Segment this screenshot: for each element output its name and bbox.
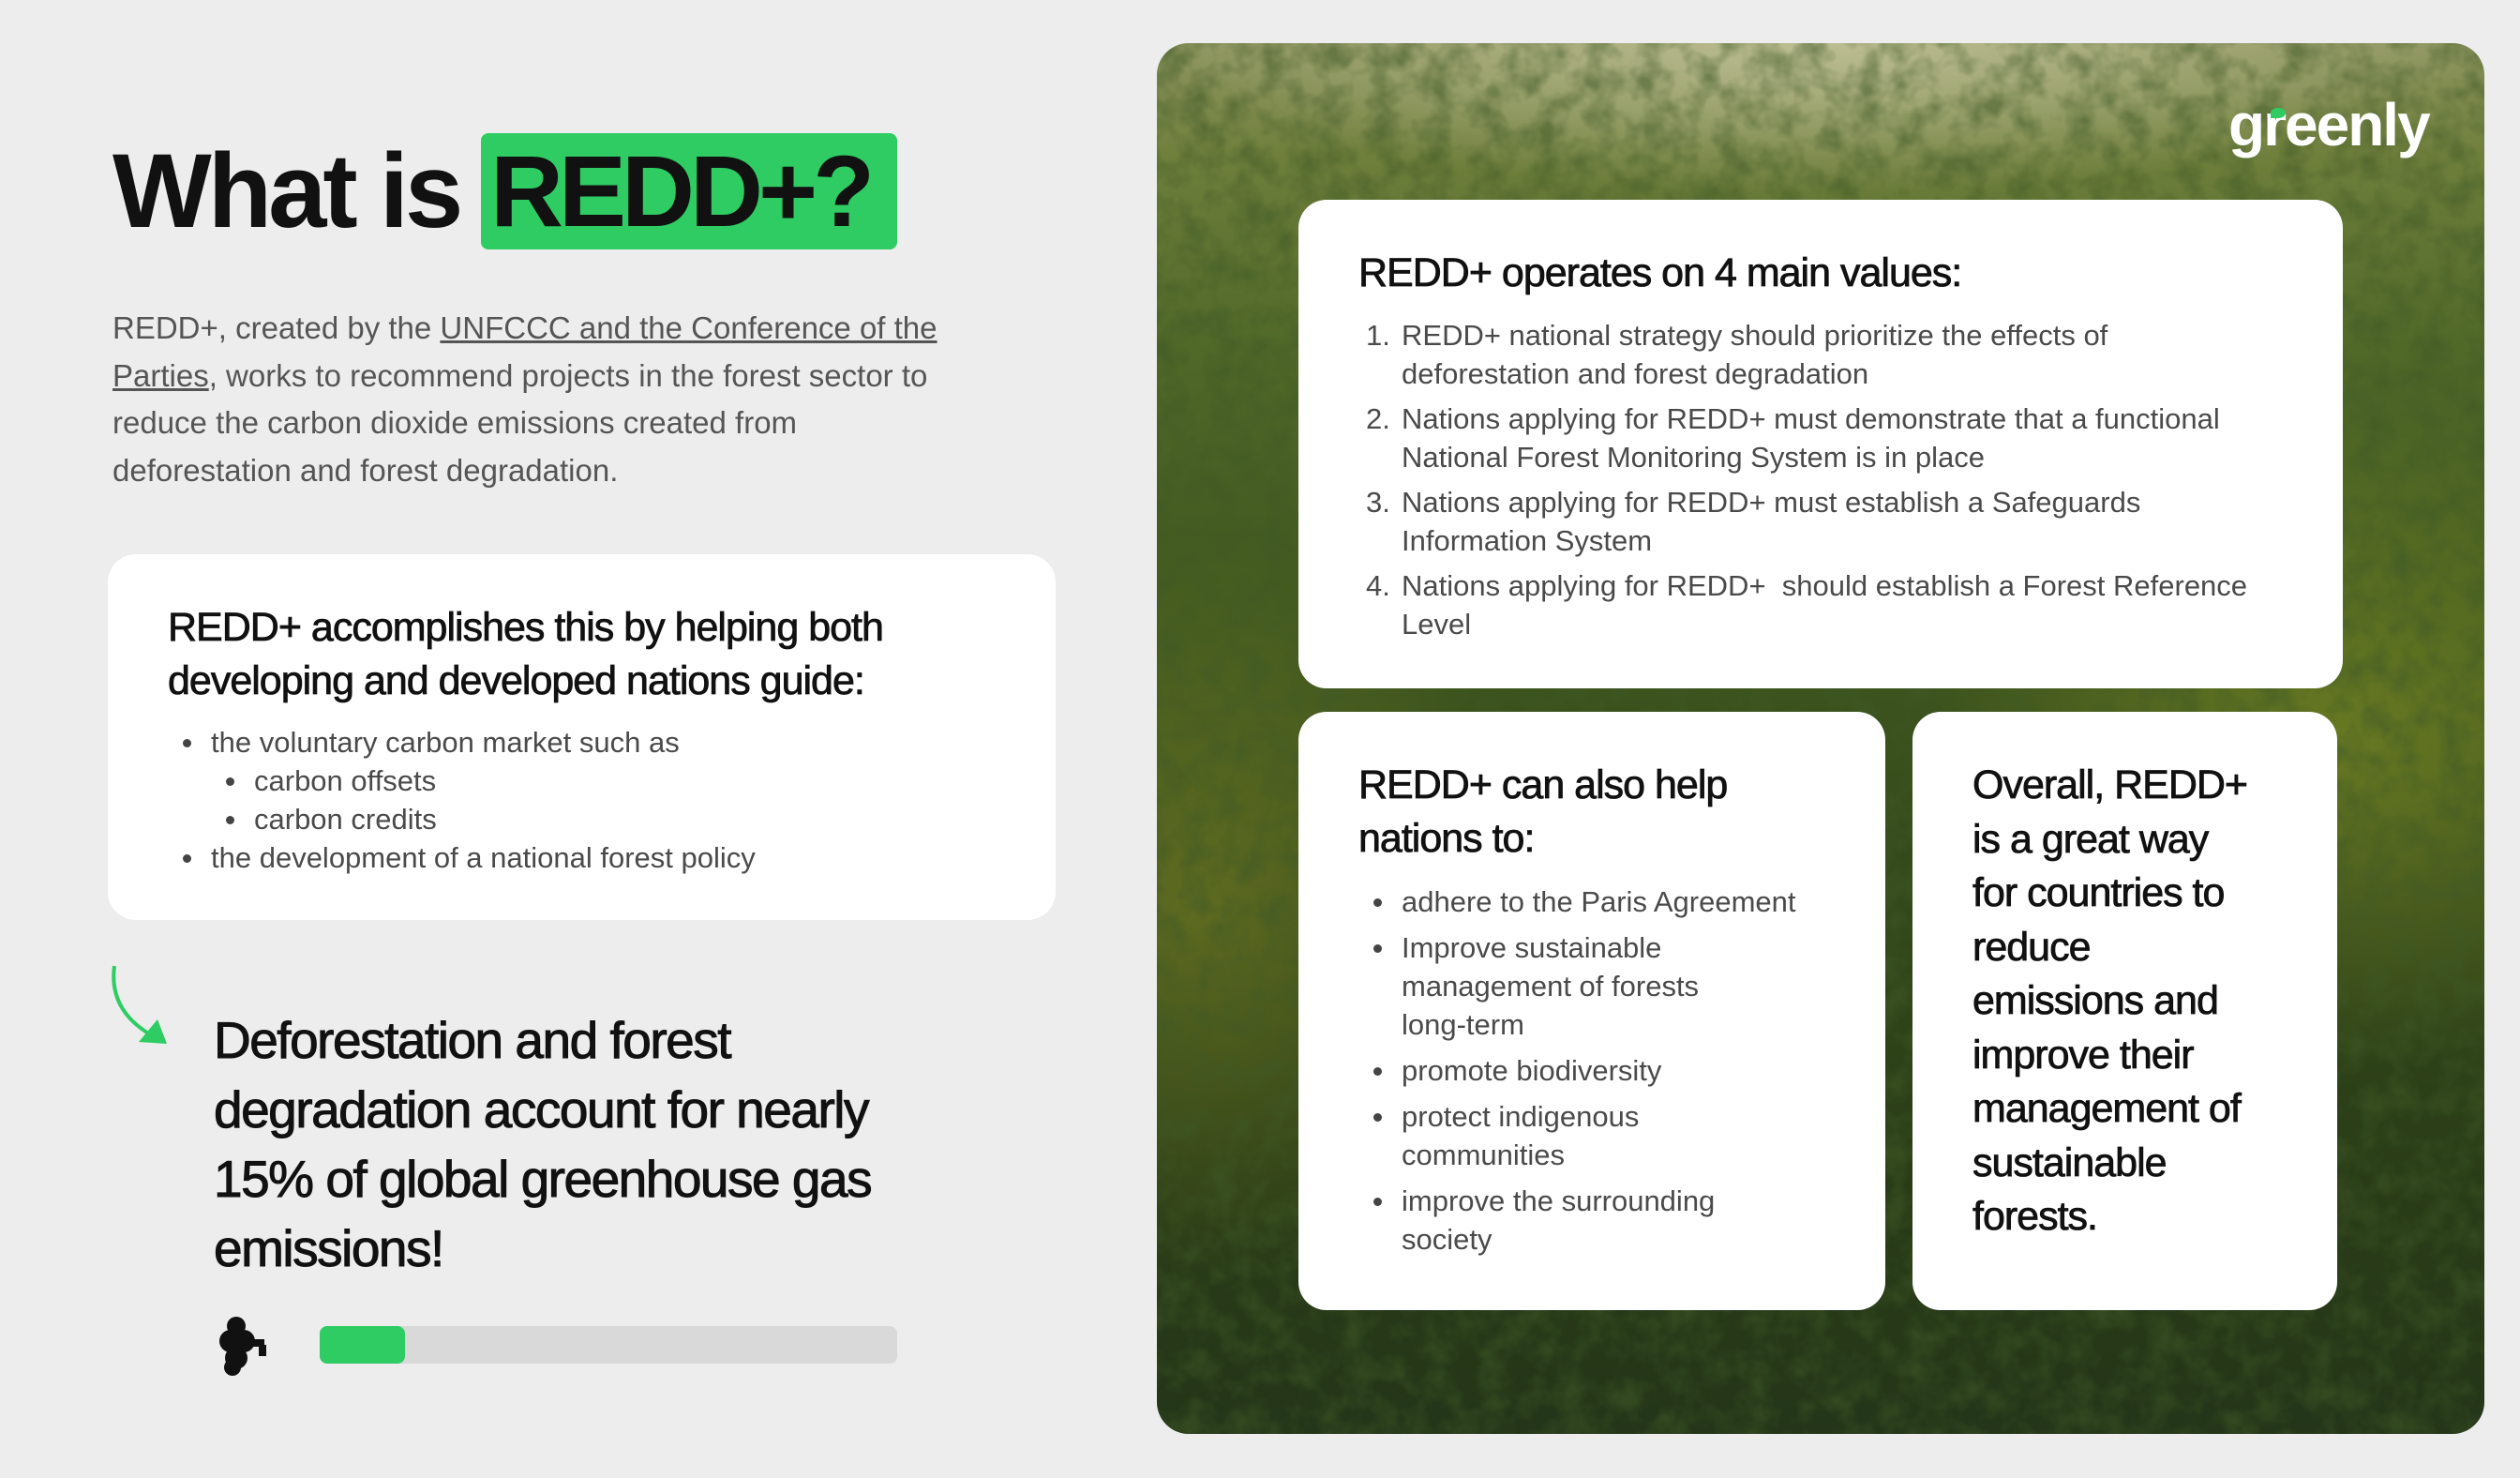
intro paragraph: deforestation and forest degradation.: [112, 452, 618, 488]
stat text: 15% of global greenhouse gas: [214, 1150, 871, 1208]
icon: smoke: [219, 1317, 266, 1376]
bullet list: promote biodiversity: [1402, 1054, 1661, 1087]
numbered list: [1366, 319, 2247, 641]
conclusion text: [1972, 762, 2247, 1239]
bullet list: [183, 726, 756, 874]
numbered list: Level: [1402, 608, 1471, 641]
bullet list: [1373, 885, 1796, 1256]
panel heading: REDD+ operates on 4 main values:: [1358, 250, 1961, 295]
panel heading: nations to:: [1358, 816, 1534, 861]
panel heading: developing and developed nations guide:: [168, 658, 864, 703]
numbered list: National Forest Monitoring System is in place: [1402, 441, 1985, 474]
intro paragraph: Parties, works to recommend projects in the forest sector to: [112, 358, 927, 392]
title highlight: REDD+?: [490, 134, 870, 248]
numbered list: REDD+ national strategy should prioritize the effects of: [1402, 319, 2108, 352]
stat text: Deforestation and forest: [214, 1011, 730, 1069]
bullet list: management of forests: [1402, 970, 1699, 1003]
conclusion text: management of: [1972, 1086, 2241, 1131]
conclusion text: Overall, REDD+: [1972, 762, 2247, 807]
photo panel: [1157, 43, 2484, 1434]
panel heading: REDD+ accomplishes this by helping both: [168, 605, 883, 650]
conclusion text: improve their: [1972, 1032, 2194, 1077]
panel heading: [1358, 762, 1727, 861]
bullet list: the development of a national forest policy: [211, 841, 756, 874]
progress bar: [320, 1326, 897, 1364]
panel heading: [168, 605, 883, 703]
bullet list: improve the surrounding: [1402, 1184, 1715, 1217]
panel: 4 main values: [1298, 200, 2343, 688]
panel: 4 main values: 4.: [1366, 569, 1390, 602]
stat text: degradation account for nearly: [214, 1080, 868, 1139]
bullet list: the voluntary carbon market such as: [211, 726, 680, 759]
forest texture: [1157, 43, 2484, 1434]
conclusion text: emissions and: [1972, 978, 2218, 1023]
intro paragraph: [112, 310, 938, 488]
panel: overall: [1912, 712, 2337, 1310]
conclusion text: sustainable: [1972, 1140, 2167, 1185]
conclusion text: is a great way: [1972, 816, 2208, 861]
numbered list: Nations applying for REDD+ must establish a Safeguards: [1402, 486, 2140, 519]
title: [112, 132, 897, 249]
logo: greenly: [2228, 91, 2429, 158]
bullet list: carbon credits: [254, 803, 437, 836]
bullet list: communities: [1402, 1139, 1565, 1171]
numbered list: Information System: [1402, 524, 1652, 557]
stat text: [214, 1011, 872, 1277]
conclusion text: reduce: [1972, 925, 2090, 970]
conclusion text: forests.: [1972, 1194, 2097, 1239]
numbered list: deforestation and forest degradation: [1402, 357, 1868, 390]
panel heading: REDD+ can also help: [1358, 762, 1727, 807]
panel: 4 main values: 1.: [1366, 319, 1390, 352]
bullet list: carbon offsets: [254, 764, 436, 797]
panel: accomplishes: [108, 554, 1056, 920]
panel: can also help: [1298, 712, 1885, 1310]
bullet list: adhere to the Paris Agreement: [1402, 885, 1795, 918]
panel: 4 main values: 3.: [1366, 486, 1390, 519]
bullet list: society: [1402, 1223, 1492, 1256]
stat text: emissions!: [214, 1219, 443, 1277]
title: What is: [112, 132, 459, 249]
bullet list: Improve sustainable: [1402, 931, 1661, 964]
arrow: [112, 966, 167, 1044]
panel: 4 main values: 2.: [1366, 402, 1390, 435]
intro paragraph: reduce the carbon dioxide emissions created from: [112, 405, 797, 440]
conclusion text: for countries to: [1972, 870, 2224, 915]
numbered list: Nations applying for REDD+ should establish a Forest Reference: [1402, 569, 2247, 602]
bullet list: long-term: [1402, 1008, 1524, 1041]
numbered list: Nations applying for REDD+ must demonstrate that a functional: [1402, 402, 2220, 435]
intro paragraph: REDD+, created by the UNFCCC and the Conference of the: [112, 310, 938, 345]
bullet list: protect indigenous: [1402, 1100, 1639, 1133]
